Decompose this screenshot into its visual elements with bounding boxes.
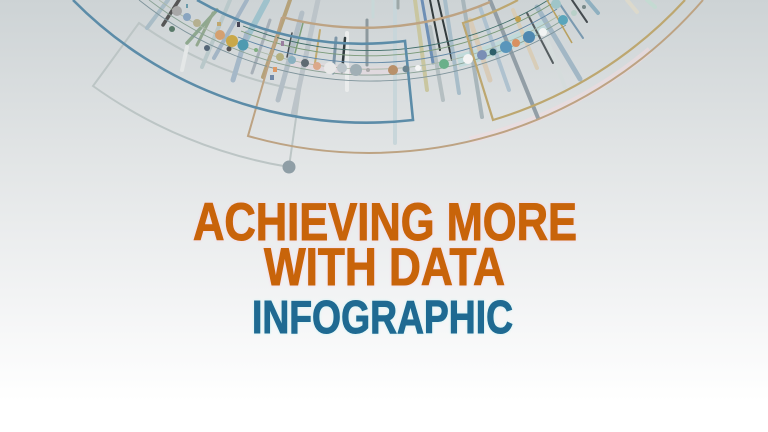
subtitle: INFOGRAPHIC bbox=[252, 291, 513, 343]
small data ticks bbox=[186, 4, 284, 80]
radial spokes: light bbox=[182, 0, 655, 143]
frame: tan right segment bbox=[463, 0, 685, 120]
frame: blue segment bbox=[73, 0, 413, 123]
frame: tan outer segment bbox=[248, 0, 703, 153]
title line 2: WITH DATA bbox=[264, 238, 505, 297]
arc: tan inner bbox=[282, 2, 490, 28]
title bbox=[193, 193, 577, 343]
thin concentric arc bundle bbox=[139, 0, 566, 81]
radial data graphic bbox=[73, 0, 703, 174]
data dots bbox=[169, 0, 586, 76]
pale glow bands bbox=[290, 24, 650, 140]
radial spokes: coloured bbox=[147, 0, 598, 118]
title line 1: ACHIEVING MORE bbox=[193, 193, 577, 252]
frame: grey segment with end dot bbox=[93, 23, 300, 167]
diagonal: tan frame edge bbox=[547, 0, 572, 43]
icon: anchor dot bbox=[282, 160, 296, 174]
